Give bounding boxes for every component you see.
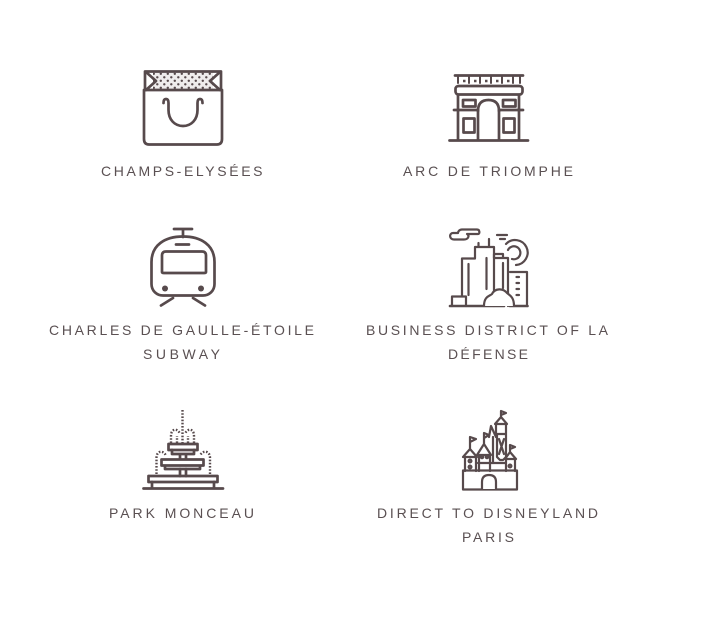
- label: Direct to Disneyland Paris: DIRECT TO DISNEYLAND: [377, 505, 598, 521]
- label: Champs-Elysées: CHAMPS-ELYSÉES: [101, 163, 262, 179]
- label: Business district of La Défense: [366, 322, 609, 362]
- label: Charles de Gaulle-Étoile subway: CHARLES DE GAULLE-ÉTOILE: [49, 322, 314, 338]
- icon: fountain: [144, 410, 223, 488]
- panel: Arc de Triomphe: [403, 76, 573, 179]
- panel: Business district of La Défense: [366, 230, 609, 362]
- panel: Charles de Gaulle-Étoile subway: [49, 229, 314, 362]
- label: Direct to Disneyland Paris: PARIS: [462, 529, 514, 545]
- icon: subway train: [152, 229, 214, 306]
- panel: Champs-Elysées: [101, 72, 262, 179]
- panel: Direct to Disneyland Paris: [377, 411, 598, 545]
- label: Arc de Triomphe: ARC DE TRIOMPHE: [403, 163, 573, 179]
- panel: Park Monceau: [109, 410, 254, 521]
- label: Park Monceau: PARK MONCEAU: [109, 505, 254, 521]
- label: Direct to Disneyland Paris: [377, 505, 598, 545]
- icon: city skyline: [450, 230, 528, 306]
- label: Charles de Gaulle-Étoile subway: SUBWAY: [143, 346, 221, 362]
- label: Business district of La Défense: DÉFENSE: [448, 346, 528, 362]
- label: Charles de Gaulle-Étoile subway: [49, 322, 314, 362]
- icon: shopping bag: [144, 72, 222, 144]
- label: Business district of La Défense: BUSINESS DISTRICT OF LA: [366, 322, 609, 338]
- icon: castle: [463, 411, 517, 490]
- icon: triumphal arch: [450, 76, 528, 140]
